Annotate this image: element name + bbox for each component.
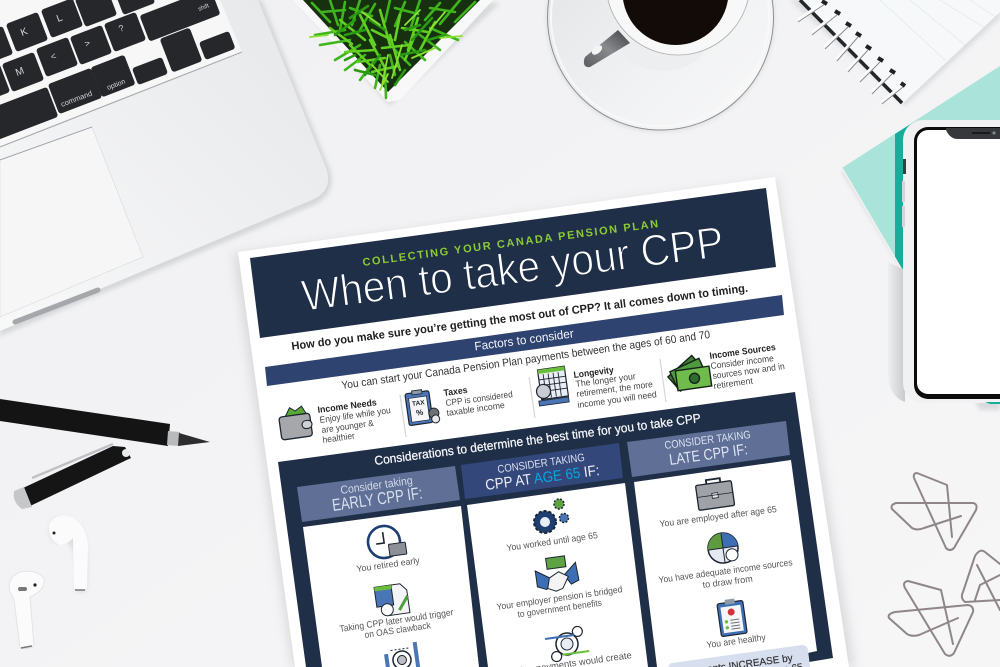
factor: income sources xyxy=(668,342,785,391)
factor: taxes: Taxes xyxy=(443,385,468,398)
column header: CONSIDER TAKING xyxy=(497,452,586,476)
key labels: < xyxy=(49,51,58,62)
icon: tax clipboard: % xyxy=(415,408,424,418)
column header xyxy=(627,421,790,477)
callout: payments increase xyxy=(660,645,811,667)
icon: money arrows xyxy=(544,625,590,663)
icon: tax clipboard: TAX xyxy=(412,399,426,408)
earbud one xyxy=(49,516,88,592)
icon: health clipboard xyxy=(716,597,747,637)
column header: CPP AT AGE 65 IF: xyxy=(484,462,601,494)
trackpad xyxy=(0,127,143,317)
factor: income needs: are younger & xyxy=(321,418,374,435)
text: healthy: You are healthy xyxy=(706,632,767,650)
text: employed after 65: You are employed after age 65 xyxy=(659,504,777,529)
factor: income sources: sources now and in xyxy=(712,361,785,381)
factor: longevity: income you will need xyxy=(577,389,657,410)
factor: longevity: retirement, the more xyxy=(576,379,653,399)
column: late CPP xyxy=(627,421,817,667)
icon: wallet xyxy=(278,405,314,440)
factor: income needs: healthier xyxy=(322,431,355,445)
column header: CONSIDER TAKING xyxy=(664,429,751,452)
key labels: K xyxy=(19,26,30,39)
factor: income sources: Income Sources xyxy=(709,342,776,361)
eyebrow: COLLECTING YOUR CANADA PENSION PLAN xyxy=(362,218,659,269)
icon: calendar with coin xyxy=(534,366,569,406)
icon: gears xyxy=(534,499,568,533)
key labels: > xyxy=(83,38,92,49)
column header: LATE CPP IF: xyxy=(668,441,749,469)
text: OAS clawback: Taking CPP later would trigger xyxy=(339,607,454,634)
key labels: command xyxy=(59,89,93,109)
key labels: shift xyxy=(198,3,210,13)
factor: longevity: Longevity xyxy=(573,365,615,380)
icon: clock with briefcase xyxy=(366,523,407,560)
factor: longevity: The longer your xyxy=(575,371,636,389)
keyboard keys xyxy=(0,0,236,163)
coffee cup and saucer xyxy=(546,0,774,132)
panel heading: Considerations to determine the best time for you to take CPP xyxy=(374,411,702,468)
text: worked until 65: You worked until age 65 xyxy=(506,530,598,553)
factor: taxes: CPP is considered xyxy=(445,389,513,408)
factor: taxes xyxy=(405,385,513,427)
icon: handshake xyxy=(534,554,580,594)
text: retired early: You retired early xyxy=(356,555,421,574)
factor dividers xyxy=(400,359,666,437)
icon: tax clipboard xyxy=(405,388,440,427)
paper clips xyxy=(889,473,1000,656)
text: employer pension: Your employer pension is bridged xyxy=(496,584,623,612)
key labels: M xyxy=(14,66,26,79)
laptop xyxy=(0,0,332,336)
potted plant xyxy=(293,0,500,106)
text: employer pension: to government benefits xyxy=(517,598,603,619)
factor: longevity xyxy=(534,365,657,410)
teal notebook xyxy=(842,66,1000,410)
factor: income sources: retirement xyxy=(713,376,754,391)
infographic paper xyxy=(233,177,855,667)
spiral binding xyxy=(798,0,905,104)
earbud two xyxy=(9,571,44,649)
intro sentence: How do you make sure you’re getting the most out of CPP? It all comes down to timing. xyxy=(291,283,749,353)
column: CPP at age 65 xyxy=(461,443,648,667)
factor: income needs: Enjoy life while you xyxy=(319,405,391,425)
column header: EARLY CPP IF: xyxy=(331,483,424,515)
laptop notch xyxy=(15,290,98,322)
factors band xyxy=(265,295,784,386)
column: early CPP xyxy=(297,466,479,667)
factors subtitle: You can start your Canada Pension Plan payments between the ages of 60 and 70 xyxy=(341,329,711,392)
key labels: L xyxy=(55,12,65,25)
title: When to take your CPP xyxy=(299,218,727,321)
key labels xyxy=(14,3,210,109)
pen cap xyxy=(14,444,131,509)
text: adequate income: You have adequate income sources xyxy=(658,557,793,585)
factors band: Factors to consider xyxy=(474,326,575,353)
header banner xyxy=(250,188,776,338)
grass xyxy=(310,0,475,98)
icon: briefcase xyxy=(695,477,735,510)
icon: pie chart xyxy=(706,531,740,565)
column header xyxy=(297,466,460,522)
column header: Consider taking xyxy=(340,475,413,497)
spiral notebook xyxy=(790,0,1000,106)
factor: income sources: Consider income xyxy=(710,353,774,371)
pen xyxy=(0,399,210,446)
text: OAS clawback: on OAS clawback xyxy=(364,620,432,640)
icon: coin cut off xyxy=(385,642,420,667)
key labels: ? xyxy=(117,23,125,34)
key labels: option xyxy=(106,78,127,92)
considerations panel xyxy=(278,392,833,667)
factor: income needs xyxy=(278,397,391,445)
icon: banknotes xyxy=(668,356,712,391)
text: adequate income: to draw from xyxy=(702,574,754,590)
factor: income needs: Income Needs xyxy=(317,397,377,415)
factor: taxes: taxable income xyxy=(446,400,505,418)
column header xyxy=(461,443,623,499)
smartphone xyxy=(888,120,1000,404)
icon: calculator and document xyxy=(374,583,410,617)
